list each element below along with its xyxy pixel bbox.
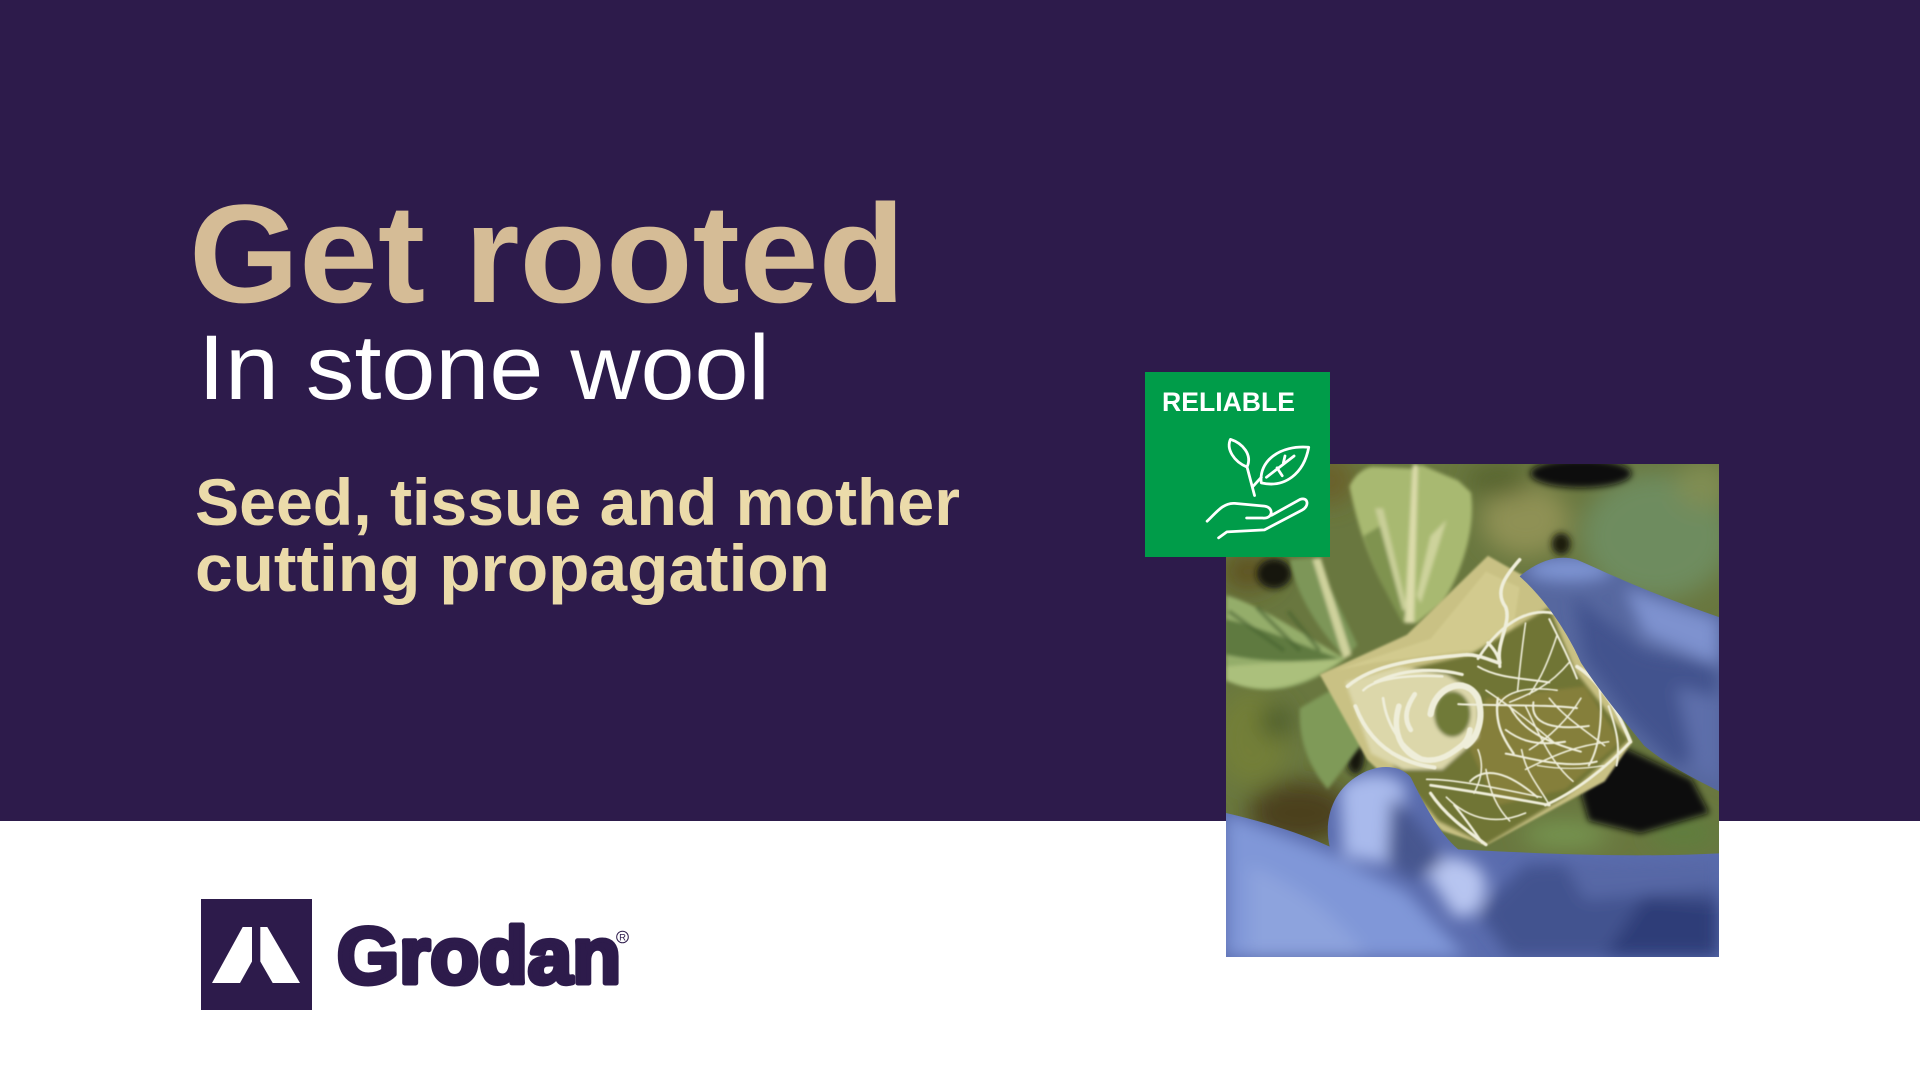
badge label: RELIABLE xyxy=(1162,387,1295,417)
registered mark: R xyxy=(619,932,626,944)
logo square mark xyxy=(201,899,312,1010)
title: Get rooted: Get rooted xyxy=(189,175,905,332)
white roots xyxy=(1347,560,1630,845)
badge background xyxy=(1145,372,1330,557)
subtitle: In stone wool: In stone wool xyxy=(198,317,770,419)
tagline text block: cutting propagation xyxy=(195,531,830,605)
logo: Grodan xyxy=(201,899,628,1010)
icon: seedling above open hand xyxy=(1207,439,1309,538)
photo: gloved hands holding rooted stone wool cube xyxy=(1226,464,1719,957)
photo background foliage xyxy=(1217,457,1731,957)
stone wool cube xyxy=(1320,556,1632,845)
leaves behind the cube xyxy=(1226,465,1472,789)
tagline text block xyxy=(195,465,960,605)
purple background band xyxy=(0,0,1920,821)
tagline text block: Seed, tissue and mother xyxy=(195,465,960,539)
pale wool left corner xyxy=(1345,667,1478,769)
bottom glove xyxy=(1226,762,1721,959)
logo wordmark: Grodan xyxy=(337,911,621,1000)
root-covered cube face xyxy=(1367,607,1629,845)
right glove xyxy=(1520,558,1719,792)
badge: reliable xyxy=(1145,372,1330,557)
registered mark xyxy=(617,931,628,944)
